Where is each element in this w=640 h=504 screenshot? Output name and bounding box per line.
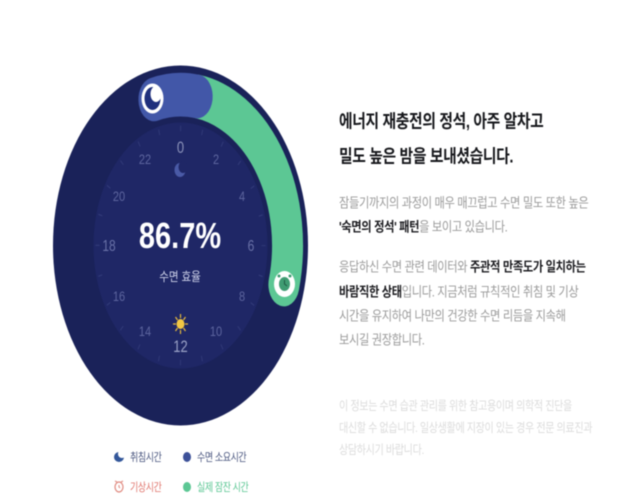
disclaimer: 대신할 수 없습니다. 일상생활에 지장이 있는 경우 전문 의료진과 [339, 421, 592, 435]
clock hour labels: 20 [113, 189, 125, 204]
legend [114, 450, 248, 494]
detail paragraph: 시간을 유지하여 나만의 건강한 수면 리듬을 지속해 [339, 308, 566, 324]
icon: bedtime moon [142, 84, 164, 114]
outer dial [53, 66, 308, 426]
clock hour labels [102, 138, 255, 356]
actual sleep arc [197, 96, 288, 285]
clock hour labels: 22 [139, 152, 151, 167]
icon: wake alarm [274, 271, 295, 297]
clock tick marks [98, 128, 264, 363]
clock hour labels: 14 [139, 324, 151, 339]
detail paragraph: 보시길 권장합니다. [339, 332, 425, 348]
inner dial [94, 122, 268, 368]
legend: actual sleep: 실제 잠잔 시간 [197, 481, 248, 494]
legend: wake time: 기상시간 [130, 481, 162, 494]
disclaimer: 이 정보는 수면 습관 관리를 위한 참고용이며 의학적 진단을 [339, 399, 572, 413]
sleep latency arc [154, 95, 197, 99]
clock hour labels: 12 [173, 337, 188, 356]
summary paragraph: '숙면의 정석' 패턴을 보이고 있습니다. [339, 219, 507, 235]
legend: bedtime: 취침시간 [130, 451, 162, 464]
clock hour labels: 10 [210, 324, 222, 339]
sleep efficiency value: 86.7% [139, 215, 221, 256]
clock hour labels: 18 [102, 236, 116, 254]
icon: night moon [174, 161, 188, 177]
icon: sun [173, 314, 188, 334]
detail paragraph: 바람직한 상태입니다. 지금처럼 규칙적인 취침 및 기상 [339, 284, 578, 300]
clock hour labels: 4 [239, 189, 245, 204]
clock hour labels: 2 [213, 152, 219, 167]
summary paragraph: 잠들기까지의 과정이 매우 매끄럽고 수면 밀도 또한 높은 [339, 195, 588, 211]
headline second line: 밀도 높은 밤을 보내셨습니다. [339, 146, 513, 167]
detail paragraph: 응답하신 수면 관련 데이터와 주관적 만족도가 일치하는 [339, 259, 586, 275]
clock hour labels: 8 [239, 289, 245, 304]
clock hour labels: 0 [177, 138, 184, 157]
disclaimer: 상담하시기 바랍니다. [339, 443, 424, 457]
clock hour labels: 6 [248, 236, 255, 254]
clock hour labels: 16 [113, 289, 125, 304]
headline: 에너지 재충전의 정석, 아주 알차고 [339, 111, 543, 132]
sleep efficiency label: 수면 효율 [159, 270, 201, 284]
legend: sleep latency: 수면 소요시간 [197, 451, 246, 464]
